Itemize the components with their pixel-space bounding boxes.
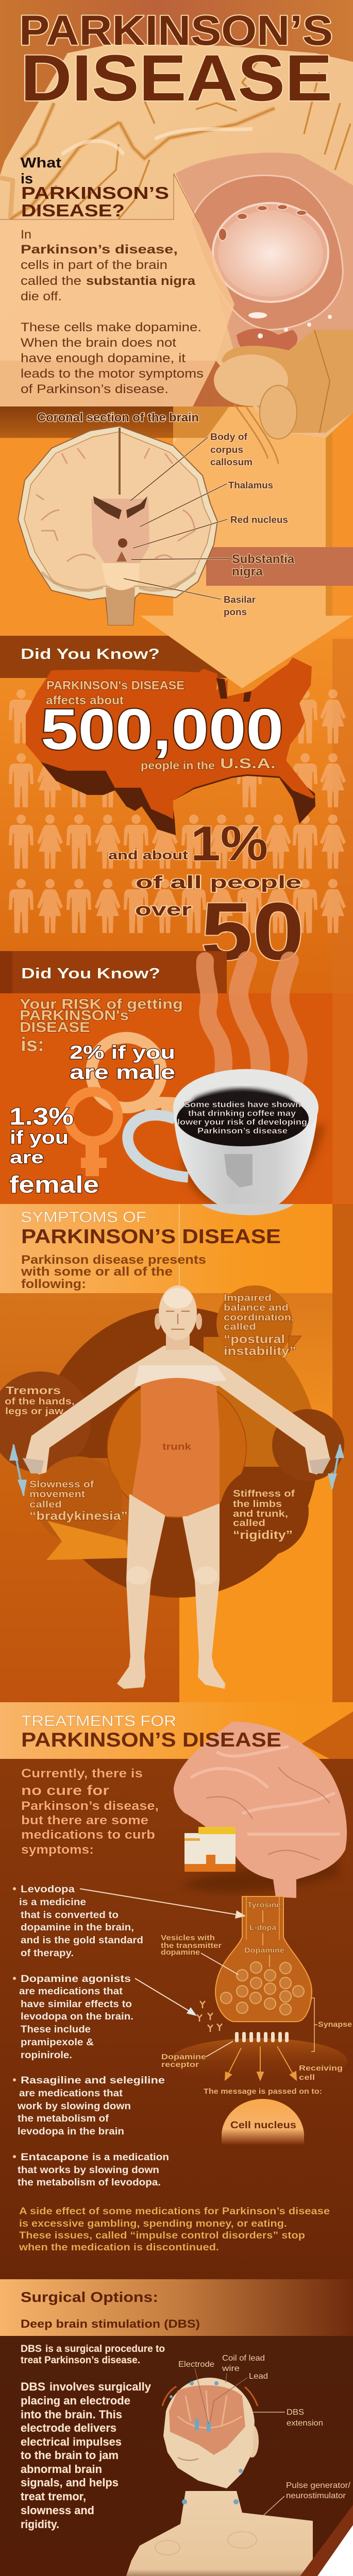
heading: deep brain stimulation: Deep brain stimulation (DBS) [21,2317,200,2330]
text: no cure intro: no cure for [21,1783,110,1798]
text: symptom slowness: called [29,1499,62,1510]
list: dopamine agonists: These include [21,2024,91,2035]
text block: definition: leads to the motor symptoms [21,367,204,381]
brain overlay [169,2385,245,2455]
brain: large sagittal brain illustration [0,44,353,464]
nuclei dots [218,205,307,241]
text: people in the usa: U.S.A. [220,755,276,771]
bubble: slowness [35,1456,129,1560]
list: levodopa: that is converted to [21,1910,119,1921]
bubble: tremors [0,1371,91,1472]
heading: did you know: Did You Know? [21,965,160,982]
diagram labels: dopamine [161,1948,200,1957]
title: PARKINSON’S [19,7,333,54]
text: no cure intro [21,1767,159,1857]
heading: symptoms of parkinson's disease: PARKINSON’S DISEASE [21,1226,281,1248]
text: symptom stiffness [233,1488,295,1541]
list: entacapone: Entacapone [21,2152,89,2163]
text: dbs description: to the brain to jam [21,2449,119,2462]
heading: parkinson's disease?: DISEASE? [21,201,125,220]
list: dopamine agonists: levodopa on the brain. [21,2011,133,2022]
panel: what is parkinson's disease [0,155,234,446]
text: coffee fact: Some studies have shown [184,1100,301,1109]
stat: 1% of all people over 50: of all people [136,873,301,892]
stat: 1% of all people over 50: over [135,900,192,920]
list: dopamine agonists [13,1974,133,2061]
text: side effect: when the medication is discontinued. [19,2242,219,2253]
thalamus region [91,499,149,564]
list: entacapone: the metabolism of levodopa. [18,2177,161,2188]
text: dbs description [21,2344,165,2531]
heading: parkinson's disease?: PARKINSON’S [21,183,169,202]
heading: treatments for parkinson's disease: PARKINSON’S DISEASE [21,1729,281,1751]
coffee [177,1092,309,1146]
text: symptom impaired balance: balance and [224,1302,289,1313]
icon: coffee cup [128,1069,326,1213]
lakes [216,678,251,702]
heading: did you know: Did You Know? [21,646,160,663]
arrows: medications to synapse [80,1889,246,2016]
stat: 1.3% female: 1.3% [9,1103,74,1130]
list: entacapone [13,2152,169,2188]
list: dopamine agonists: ropinirole. [21,2050,72,2061]
figure: human body [23,1285,331,1689]
diagram labels: Receiving [299,2064,343,2073]
list: levodopa: of therapy. [21,1948,74,1959]
pictogram: people rows [9,689,346,933]
text: symptom tremors: of the hands, [5,1396,75,1406]
list: dopamine agonists: are medications that [19,1986,123,1997]
trunk circle [107,1379,246,1518]
receptors [235,2032,289,2042]
heading: treatments for parkinson's disease [21,1713,281,1751]
list: levodopa: and is the gold standard [21,1935,143,1946]
text: coffee fact [177,1100,307,1136]
diagram: symptom circles [0,1285,344,1598]
stat: 1% of all people over 50: and about [108,849,188,862]
text: symptom tremors: Tremors [6,1385,61,1397]
text: symptom tremors: legs or jaw [5,1406,64,1416]
diagram labels: The message is passed on to: [204,2087,322,2096]
list: entacapone: that works by slowing down [18,2165,159,2176]
text: coffee fact: Parkinson’s disease [197,1127,288,1136]
list: levodopa: Levodopa [21,1884,75,1895]
text: dbs description: rigidity. [21,2518,59,2531]
central oval [218,210,323,297]
labels: dbs callouts: DBS [287,2408,304,2417]
panel: symptoms background [0,1204,353,1702]
list: dopamine agonists: Dopamine agonists [21,1974,131,1985]
labels inside terminal: Tyrosine [247,1901,281,1909]
figure: head with dbs [123,2368,313,2576]
stat: 1.3% female: if you [10,1127,69,1148]
text block: definition: Parkinson’s disease, [21,243,178,257]
text: symptom impaired balance: “postural [224,1332,285,1346]
map: united states [26,657,315,835]
text block: definition: have enough dopamine, it [21,351,186,365]
cell nucleus [222,2099,304,2145]
cup overlap on symptoms header [201,1204,294,1215]
text: side effect [19,2206,330,2253]
diagram labels: receptor [161,2060,199,2069]
text: symptom stiffness: “rigidity” [233,1528,293,1541]
presynaptic terminal [215,1896,312,2022]
signal arrows [225,2046,296,2080]
stat: 2% male: are male [70,1062,175,1083]
text: dbs description: treat tremor, [21,2490,86,2503]
list: dopamine agonists: pramipexole & [21,2037,94,2048]
brain stem [222,330,353,433]
icon: female symbol [69,1092,118,1176]
text: symptom impaired balance: called [224,1321,256,1332]
heading: symptoms of parkinson's disease: SYMPTOMS OF [21,1209,146,1226]
text block: definition: called the [21,274,81,288]
bubble: right hand [272,1409,344,1481]
heading: surgical options: Surgical Options: [21,2289,158,2305]
list: rasagiline and selegiline: Rasagiline and selegiline [21,2075,165,2086]
heading: treatments for parkinson's disease: TREATMENTS FOR [21,1713,176,1730]
bowl [173,1108,318,1213]
labels inside terminal [244,1901,284,1954]
synapse bracket [311,1998,317,2052]
diagram: dopamine synapse [161,1896,352,2145]
legs [117,1494,165,1689]
text: dbs description: DBS [21,2380,45,2393]
labels: dbs callouts: Lead [249,2372,268,2381]
list: entacapone: is a medication [92,2152,169,2163]
text: parkinson's disease affects about: affects about [46,693,124,707]
text: dbs description: abnormal brain [21,2463,102,2476]
band: substantia nigra highlight [206,547,353,586]
handle [128,1115,188,1177]
stat: 1% of all people over 50: 1% [191,816,268,871]
text: symptom impaired balance: instability” [224,1344,296,1358]
text: no cure intro: Parkinson’s disease, [21,1799,159,1813]
text: no cure intro: but there are some [21,1814,148,1827]
midbrain [237,329,297,353]
text: symptom impaired balance: coordination, [224,1312,294,1323]
text: symptom stiffness: Stiffness of [233,1488,295,1499]
text: coffee fact: that drinking coffee may [188,1109,296,1118]
text block: definition: substantia nigra [86,274,196,288]
labels inside terminal: Dopamine [244,1946,284,1954]
stat: 1.3% female [9,1103,99,1198]
labels: dbs callouts: Pulse generator/ [286,2481,351,2490]
text: symptom stiffness: the limbs [233,1499,282,1509]
band: coronal caption [0,406,173,438]
text: symptom impaired balance [224,1293,296,1358]
diagram labels: Dopamine [161,2053,206,2061]
labels: coronal section callouts: Basilar [224,595,256,605]
stat: 2% male: 2% if you [70,1042,175,1063]
text: side effect: A side effect of some medications for Parkinson’s disease [19,2206,330,2217]
text: dbs description: into the brain. This [21,2408,122,2421]
text: risk of getting parkinson's: DISEASE [20,1019,90,1035]
midline [119,428,121,495]
corner: diagonal stripe [247,2505,353,2576]
text: no cure intro: medications to curb [21,1828,155,1842]
icon: medicine box [184,1827,236,1872]
list: levodopa: is a medicine [19,1897,86,1908]
diagram labels: Vesicles with [161,1934,215,1942]
list: dopamine agonists: have similar effects to [21,1999,132,2010]
cerebellum folds [41,572,196,590]
text: symptoms intro: following: [21,1277,86,1291]
text: symptoms intro: with some or all of the [21,1265,173,1279]
title [19,7,333,114]
labels: coronal section callouts: Body of [210,432,248,442]
panel: treatments background [0,1702,353,2279]
text: no cure intro: Currently, there is [21,1767,143,1781]
text: symptom stiffness: called [233,1518,265,1528]
text: symptom slowness: “bradykinesia” [29,1509,128,1522]
corner: white logo panel [268,2525,353,2576]
arrow: big peach arrow [140,407,353,688]
heading: symptoms of parkinson's disease [21,1209,281,1248]
text: risk of getting parkinson's: PARKINSON's [20,1007,129,1023]
trunk overlay [132,1378,220,1516]
text: symptom slowness [29,1479,128,1522]
head [166,1334,190,1350]
labels: dbs callouts: Coil of lead [222,2354,265,2363]
panel: surgical options [0,2279,353,2576]
label: trunk: trunk [162,1442,192,1452]
list: rasagiline and selegiline: the metabolism of [18,2113,109,2124]
panel: did you know 2 band [0,951,227,993]
head [163,2378,255,2488]
ear [245,2425,259,2458]
text block: definition: die off. [21,290,62,303]
cortical folds [36,448,195,562]
text: dbs description: involves surgically [49,2380,152,2393]
heading: parkinson's disease? [21,183,169,220]
stat: 1% of all people over 50 [108,816,304,977]
caption: coronal section: Coronal section of the brain [37,411,199,424]
labels: dbs callouts: wire [222,2364,240,2373]
text: parkinson's disease affects about: PARKINSON's DISEASE [46,679,184,692]
text: side effect: These issues, called “impulse control disorders” stop [19,2230,305,2241]
text: dbs description: electrode delivers [21,2421,116,2434]
text: symptom impaired balance: Impaired [224,1293,272,1303]
labels: coronal section callouts: callosum [210,457,253,467]
heading: what is: What [21,155,61,171]
text: dbs description: electrical impulses [21,2435,122,2448]
page background [0,0,353,1205]
text: people in the usa [141,755,276,772]
list: rasagiline and selegiline: levodopa in the brain [18,2126,124,2137]
icon: male symbol [91,1038,182,1119]
chin and face details [178,2458,198,2461]
labels: dbs callouts: Electrode [178,2360,214,2369]
text: risk of getting parkinson's: Your RISK of getting [20,996,183,1012]
list: levodopa: dopamine in the brain, [21,1922,134,1933]
ventricles [93,496,147,519]
diagram labels [161,1934,352,2096]
text: symptoms intro [21,1253,206,1291]
text: dbs description: treat Parkinson’s disease. [21,2355,140,2366]
labels: coronal section callouts: Substantia [232,552,295,566]
labels: coronal section callouts [124,432,295,617]
inner structures [176,152,353,361]
text block: definition: When the brain does not [21,336,176,350]
text: dbs description: DBS [21,2344,42,2354]
text: side effect: is excessive gambling, spending money, or eating. [19,2218,287,2229]
brain stem base [106,587,135,625]
leader lines [195,2368,247,2424]
title: DISEASE [21,41,332,114]
text: symptom slowness: movement [29,1489,85,1499]
text block: definition: cells in part of the brain [21,258,167,272]
list: rasagiline and selegiline: are medications that [19,2088,123,2099]
heading: what is: is [21,171,33,187]
list: rasagiline and selegiline [13,2075,165,2137]
text: parkinson's disease affects about [46,679,184,707]
diagram labels: Synapse [318,2020,352,2029]
panel: did you know heading band 1 [0,636,227,678]
basilar region [102,563,140,590]
arms and shoulders [26,1346,330,1475]
shoulders [123,2491,313,2576]
labels: coronal section callouts: pons [224,607,247,617]
text: symptom tremors [5,1385,75,1416]
text: dbs description: slowness and [21,2504,94,2517]
bubble: impaired balance [216,1285,301,1362]
diagram labels: cell [299,2073,315,2082]
text: risk of getting parkinson's [20,996,183,1056]
labels inside terminal: L-dopa [249,1923,276,1931]
diagram labels: the transmitter [161,1941,222,1950]
text block: definition: of Parkinson’s disease. [21,382,169,396]
text: risk of getting parkinson's: is: [21,1034,44,1056]
stat: 1.3% female: female [9,1171,99,1198]
text block: definition: These cells make dopamine. [21,320,201,334]
arrows: tremor motion [9,1444,344,1497]
text block: definition [21,228,204,396]
electrodes [170,2381,243,2504]
text: symptoms intro: Parkinson disease presents [21,1253,206,1267]
labels: coronal section callouts: corpus [210,445,243,455]
text: symptom slowness: Slowness of [29,1479,94,1489]
text: dbs description: placing an electrode [21,2394,130,2407]
number: 500,000: 500,000 [41,697,283,761]
rim [173,1069,318,1146]
text: dbs description: is a surgical procedure to [45,2344,165,2354]
vesicles [221,1962,304,2015]
receiving cell [170,2038,347,2083]
stat: 1.3% female: are [10,1148,44,1167]
free dopamine molecules [197,2001,222,2032]
labels: coronal section callouts: Red nucleus [230,515,288,525]
cerebrum [0,44,353,438]
labels: coronal section callouts: Thalamus [228,480,273,490]
cell nucleus: Cell nucleus [230,2120,296,2131]
steam from coffee [205,961,298,1097]
bubble: stiffness [220,1467,309,1556]
heading: what is [21,155,61,187]
sulci glow [0,103,275,219]
diagram: coronal brain section [18,426,217,625]
decorative strip beside arrow [326,371,332,616]
brain illustration: treatments [174,1722,347,1898]
stat: 2% male [70,1042,175,1083]
list: levodopa [13,1884,143,1959]
labels: coronal section callouts: nigra [232,565,263,579]
text: coffee fact: lower your risk of developing [177,1118,307,1127]
labels: dbs callouts [178,2354,351,2500]
text: dbs description: signals, and helps [21,2476,119,2489]
text: symptom stiffness: and trunk, [233,1509,288,1519]
sulci [10,62,350,219]
stat: 1% of all people over 50: 50 [201,886,304,977]
text block: definition: In [21,228,31,242]
text: no cure intro: symptoms: [21,1843,94,1857]
surgical arrows [162,2386,258,2406]
labels: dbs callouts: extension [287,2419,323,2428]
list: rasagiline and selegiline: work by slowing down [17,2101,131,2112]
text: people in the usa: people in the [141,760,215,772]
labels: dbs callouts: neurostimulator [286,2492,346,2500]
leaders [201,1953,239,2057]
